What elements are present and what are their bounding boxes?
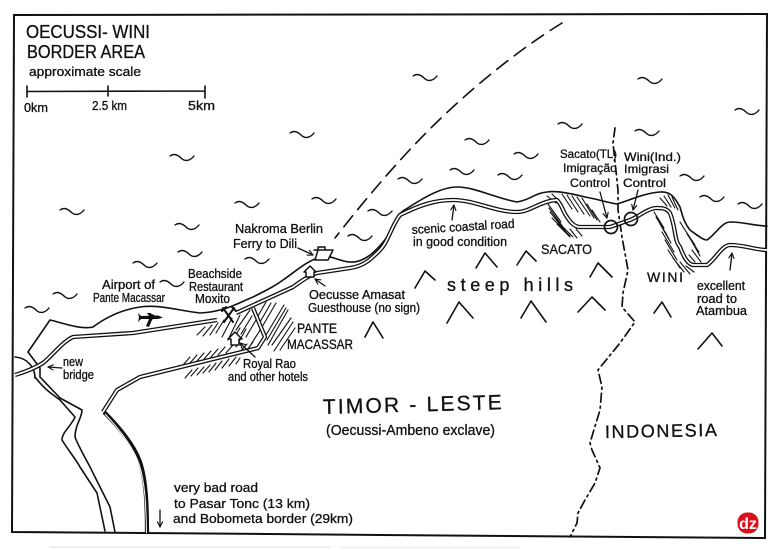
logo: dz: dz [739,516,757,533]
logo: dz [738,512,758,534]
hills [365,251,722,349]
arrow: very bad road [159,510,161,527]
label: Oecusse Amasat guesthouse: Guesthouse (no sign) [308,301,420,315]
label: Wini: WINI [647,269,683,285]
scale bar [24,86,215,115]
sea waves [25,75,762,312]
label: Timor-Leste: TIMOR - LESTE [323,391,502,419]
label: Timor-Leste: (Oecussi-Ambeno exclave) [326,423,495,439]
icon: Amasat guesthouse [304,266,316,277]
label: new bridge [63,355,94,382]
label: very bad road: very bad road [174,480,258,495]
title: OECUSSI- WINI [26,22,150,42]
label: Royal Rao [228,357,308,384]
label: very bad road: and Bobometa border (29km) [173,511,353,526]
label: excellent road to Atambua: Atambua [696,304,747,318]
border line between Timor-Leste and Indonesia [570,128,635,537]
icon: restaurant cross [222,307,236,322]
label: Oecusse Amasat guesthouse: Oecusse Amasat [309,288,406,302]
arrows [48,190,732,527]
coastline [15,187,767,378]
label: Royal Rao: and other hotels [228,370,308,384]
arrow: Wini control [633,190,638,210]
label: scenic coastal road [411,217,515,249]
label: Beachside restaurant: Restaurant [189,280,243,294]
label: very bad road: to Pasar Tonc (13 km) [174,496,310,511]
scale bar: 2.5 km [92,99,127,113]
label: Wini immigration control [623,150,681,190]
label: new bridge: bridge [63,368,94,382]
label: Beachside restaurant [188,267,243,306]
label: Pante Macassar: MACASSAR [287,336,353,352]
river [28,352,115,532]
label: scenic coastal road: in good condition [413,235,507,249]
label: very bad road [173,480,353,526]
title [26,22,150,62]
title: BORDER AREA [27,42,145,62]
label: Nakroma Berlin ferry: Nakroma Berlin [235,221,323,236]
arrow: ferry [298,248,313,255]
hatching: Pante Macassar urban area [183,302,295,378]
icon: ferry [314,247,333,260]
label: Royal Rao: Royal Rao [243,357,296,371]
label: new bridge: new [63,355,84,369]
label: Oecusse Amasat guesthouse [308,288,420,315]
arrow: Sacato control [600,192,607,218]
label: scenic coastal road: scenic coastal road [411,217,515,237]
label: Wini immigration control: Wini(Ind.) [624,150,681,164]
panel: map title and scale [24,22,215,115]
icon: Royal Rao hotel [228,332,242,345]
arrow: coastal road [452,205,454,220]
label: Sacato immigration control: Control [570,176,610,190]
label: Sacato: SACATO [541,241,592,257]
road to Pasar Tono [103,308,265,533]
icon: Sacato control point [604,220,618,234]
label: Indonesia: INDONESIA [605,420,717,442]
label: Sacato immigration control: Imigração [563,161,617,175]
label: airport: Airport of [102,278,156,292]
label: Wini immigration control: Imigrasi [624,162,669,176]
scan shadow [50,546,520,548]
arrow: hotels [240,343,255,357]
label: Nakroma Berlin ferry: Ferry to Dili [233,236,297,251]
label: airport [93,278,165,305]
hatching: Wini [654,195,701,274]
arrow: new bridge [48,367,62,368]
label: Beachside restaurant: Beachside [188,267,242,281]
label: excellent road to Atambua: excellent [697,279,746,293]
arrow: guesthouse [315,279,325,286]
label: Wini immigration control: Control [623,176,666,190]
label: Sacato immigration control [560,147,617,190]
ferry route dashed line [335,23,562,238]
label: excellent road to Atambua [696,279,747,318]
label: excellent road to Atambua: road to [697,292,737,306]
hatching: Sacato [547,194,600,238]
scale bar: 0km [24,101,48,115]
label: steep hills: steep hills [447,275,573,295]
label: Pante Macassar [287,320,353,352]
label: Sacato immigration control: Sacato(TL) [560,147,617,161]
scale caption: approximate scale [29,64,141,79]
icon: airport plane [138,313,163,327]
scale bar: 5km [188,99,215,113]
label: Pante Macassar: PANTE [297,320,337,336]
label: airport: Pante Macassar [93,291,165,305]
label: Beachside restaurant: Moxito [195,292,230,306]
icon: Wini control point [624,212,638,226]
label: Timor-Leste [323,391,502,439]
arrow: excellent road [730,253,732,270]
coastal road [15,200,767,375]
label: Nakroma Berlin ferry [233,221,323,251]
